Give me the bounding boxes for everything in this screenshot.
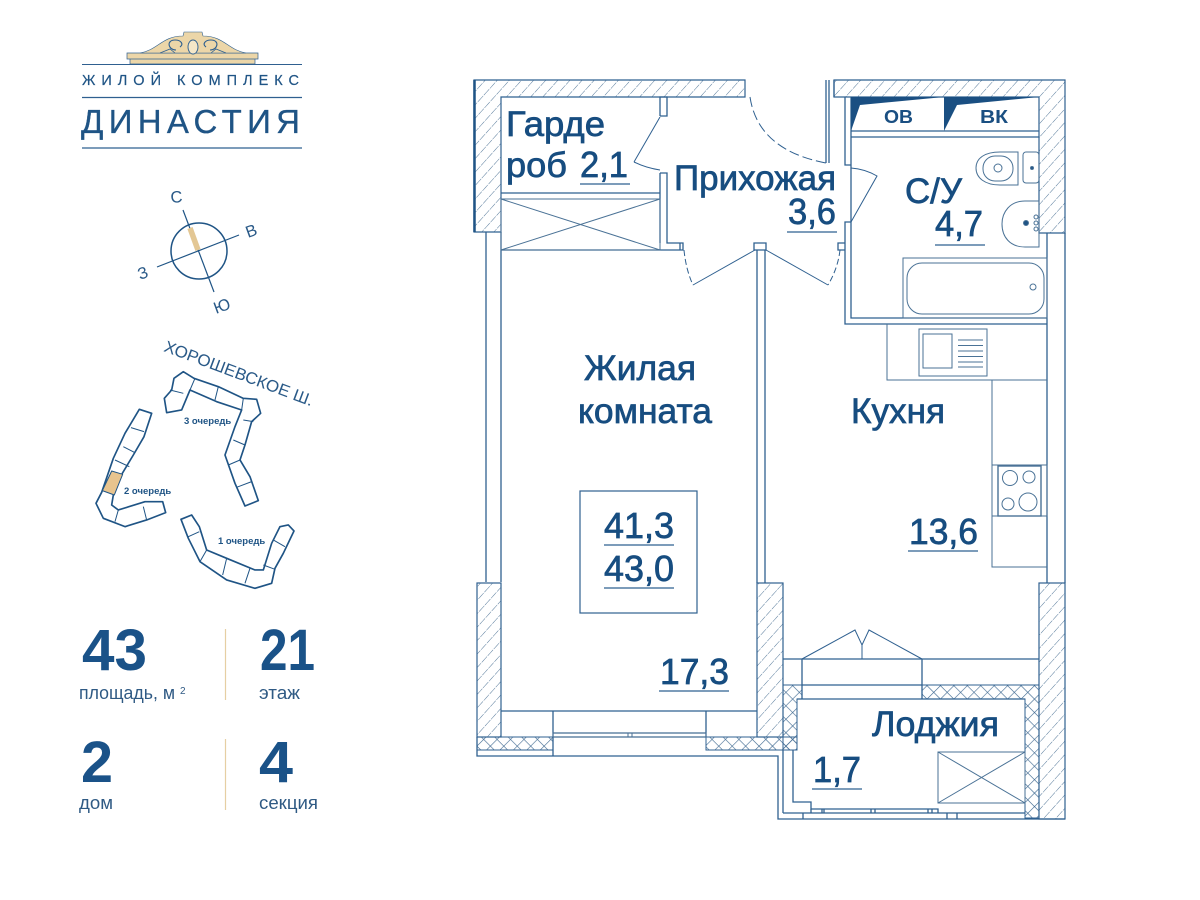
- hatched bearing walls: [474, 80, 1065, 819]
- area summary box: [580, 491, 697, 613]
- room label: wardrobe: [506, 105, 630, 185]
- insulated cross-hatched walls: [477, 685, 1039, 818]
- room label: loggia: Лоджия: [872, 705, 999, 744]
- room label: hallway: Прихожая: [674, 159, 836, 198]
- site plan: [96, 338, 316, 588]
- room label: wardrobe: Гарде: [506, 105, 605, 144]
- building: queue 3: [164, 372, 261, 506]
- stat: floor: [259, 618, 315, 703]
- partition walls and outer lines: [477, 80, 1065, 819]
- room label: hallway: [674, 159, 837, 232]
- room label: wardrobe: 2,1: [580, 144, 628, 185]
- label: queue 2: 2 очередь: [124, 486, 171, 497]
- room label: living room: [578, 349, 729, 692]
- room label: living room: Жилая: [584, 349, 696, 388]
- logo subtitle: ЖИЛОЙ КОМПЛЕКС: [82, 71, 299, 89]
- room label: living room: 17,3: [660, 651, 729, 692]
- stat: section: [259, 730, 318, 813]
- highlighted apartment section: [102, 471, 123, 495]
- door swings: [634, 97, 922, 659]
- stat: floor: 21: [260, 618, 315, 683]
- compass: С: [170, 188, 183, 207]
- building: queue 2: [96, 409, 166, 527]
- room label: bathroom: С/У: [905, 172, 963, 211]
- room label: wardrobe: роб: [506, 146, 567, 185]
- compass: В: [243, 221, 260, 242]
- stat: section: секция: [259, 793, 318, 813]
- wardrobe X storage box: [501, 199, 660, 250]
- room label: bathroom: [905, 172, 985, 245]
- room label: kitchen: Кухня: [851, 392, 945, 431]
- stats block: [79, 618, 318, 813]
- icon: bathtub: [903, 258, 1047, 318]
- ventilation shafts: [851, 97, 1039, 131]
- icon: stove: [992, 465, 1047, 516]
- room label: kitchen: 13,6: [909, 511, 978, 552]
- room label: hallway: 3,6: [788, 191, 836, 232]
- building: queue 1: [181, 515, 294, 588]
- stat: floor: этаж: [259, 683, 300, 703]
- room label: bathroom: 4,7: [935, 203, 983, 244]
- logo name: ДИНАСТИЯ: [81, 103, 300, 140]
- room label: kitchen: [851, 392, 978, 552]
- kitchen counter: [887, 324, 1047, 567]
- logo ornament: [127, 32, 258, 64]
- ventilation shafts: ВК: [980, 107, 1009, 127]
- logo: Жилой комплекс Династия: [81, 32, 302, 148]
- icon: kitchen sink: [919, 329, 987, 376]
- room label: loggia: [812, 705, 999, 790]
- area summary box: 41,3: [604, 505, 674, 546]
- window: living room: [553, 733, 706, 737]
- icon: toilet: [976, 152, 1039, 185]
- label: queue 1: 1 очередь: [218, 536, 265, 547]
- stat: area: площадь, м: [79, 683, 175, 703]
- compass: З: [135, 263, 151, 284]
- stat: building: дом: [79, 793, 113, 813]
- compass: Ю: [211, 295, 233, 318]
- icon: washbasin: [1002, 201, 1039, 247]
- stat: area: 2: [180, 686, 186, 697]
- floor plan: [474, 80, 1065, 819]
- loggia X storage box: [938, 752, 1025, 803]
- stat: area: [79, 618, 186, 703]
- area summary box: 43,0: [604, 548, 674, 589]
- compass: [135, 188, 260, 318]
- street name: ХОРОШЕВСКОЕ Ш.: [162, 338, 316, 410]
- ventilation shafts: ОВ: [884, 107, 913, 127]
- room label: living room: комната: [578, 392, 713, 431]
- stat: area: 43: [82, 618, 147, 683]
- stat: section: 4: [259, 730, 293, 795]
- room label: loggia: 1,7: [813, 749, 861, 790]
- label: queue 3: 3 очередь: [184, 416, 231, 427]
- stat: building: 2: [81, 730, 113, 795]
